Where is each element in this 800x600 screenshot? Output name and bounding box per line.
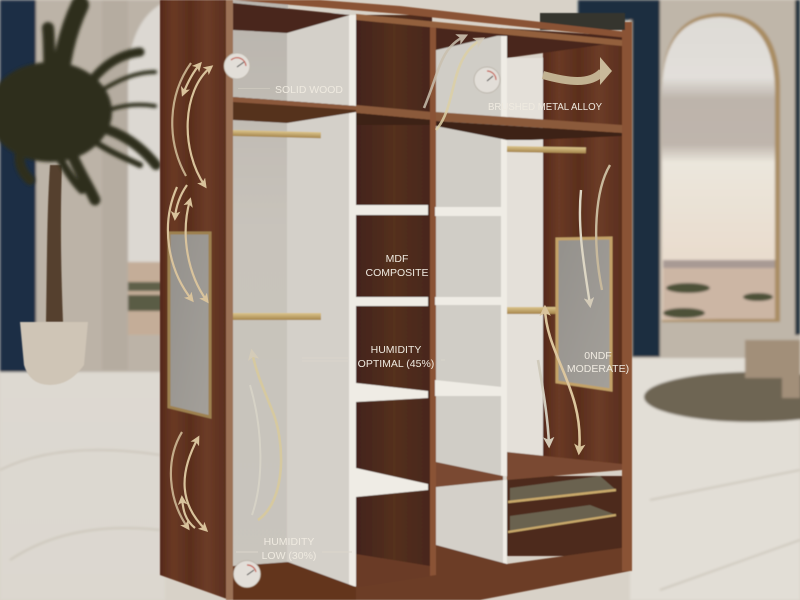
planter (20, 322, 88, 385)
gold racks (508, 490, 616, 532)
interior: left bay side panel (287, 10, 350, 587)
left bay front edge (349, 15, 356, 586)
label: MDF composite: COMPOSITE (365, 267, 429, 279)
label: humidity optimal: HUMIDITY (371, 344, 421, 356)
left floor (0, 372, 165, 600)
label: humidity optimal: OPTIMAL (45%) (358, 358, 434, 370)
right bay back (507, 58, 545, 458)
upper soffit (233, 3, 350, 33)
lower left shelf (436, 462, 503, 487)
label: MDF moderate: MODERATE) (567, 363, 629, 375)
plinth (356, 545, 630, 600)
shelf 4 (356, 468, 428, 497)
left front edge (226, 0, 233, 600)
airflow arrows: right upper (580, 165, 610, 305)
gauge: bottom left (234, 560, 260, 588)
label: humidity low: HUMIDITY (264, 536, 314, 548)
right bay wood back (543, 34, 623, 470)
airflow arrows: left panel top (172, 63, 211, 186)
right outer frame (622, 22, 632, 571)
airflow arrows: left panel middle (168, 185, 207, 301)
white shelves (356, 205, 502, 497)
right upper shelf (436, 112, 622, 133)
right mirror panel (557, 238, 611, 390)
label: solid wood: SOLID WOOD (275, 84, 343, 96)
gauge: top centre (474, 67, 500, 93)
shelf 3 (356, 383, 428, 402)
palm fronds (0, 5, 156, 200)
right floor (630, 358, 800, 600)
left mirror panel (169, 233, 210, 417)
left wall (0, 0, 165, 375)
lower storage glass shelves (510, 476, 616, 532)
right center bay front edge (501, 34, 507, 476)
label: solid wood (238, 84, 343, 96)
right center bay back (436, 36, 504, 566)
top board (233, 0, 628, 38)
label: MDF composite: MDF (386, 253, 408, 265)
left curtain (0, 0, 36, 376)
label: humidity low (236, 536, 352, 562)
shelf 1 (356, 205, 428, 215)
wardrobe (160, 0, 632, 600)
right curtain (578, 0, 660, 357)
right wall (630, 0, 800, 360)
center upper shelf (356, 105, 432, 120)
label: humidity optimal (302, 344, 445, 370)
right soffit (436, 24, 622, 58)
gauge: top left (224, 53, 250, 79)
right center top soffit (436, 28, 505, 50)
rug (644, 372, 800, 422)
left arched window (128, 2, 165, 335)
large outflow arrow (543, 57, 612, 85)
shelf 2 (356, 297, 428, 306)
label: MDF moderate: 0NDF (584, 350, 612, 362)
label: brushed metal alloy: BRUSHED METAL ALLOY (488, 101, 602, 113)
sofa (745, 340, 800, 398)
center floor (356, 554, 430, 587)
lower storage (507, 476, 623, 556)
gold rods (233, 130, 321, 138)
airflow arrows: left panel bottom (171, 432, 206, 530)
marble veins (0, 450, 800, 590)
palm trunk (46, 165, 63, 322)
back top block (540, 13, 625, 30)
left column (102, 0, 128, 370)
label: humidity low: LOW (30%) (262, 550, 316, 562)
airflow arrows: inside left bay (250, 352, 281, 520)
palm plant (0, 5, 156, 385)
center bay back (356, 15, 432, 587)
right lower shelf (507, 452, 622, 480)
center divider (430, 24, 436, 576)
right arched window (662, 13, 780, 322)
airflow arrows: top center (424, 36, 482, 130)
bay floor (233, 562, 432, 600)
airflow arrows: right lower (538, 308, 580, 452)
left side panel (160, 0, 227, 599)
lower white panel (436, 482, 507, 564)
interior: left bay back wall (233, 0, 288, 570)
upper shelf (233, 97, 356, 123)
